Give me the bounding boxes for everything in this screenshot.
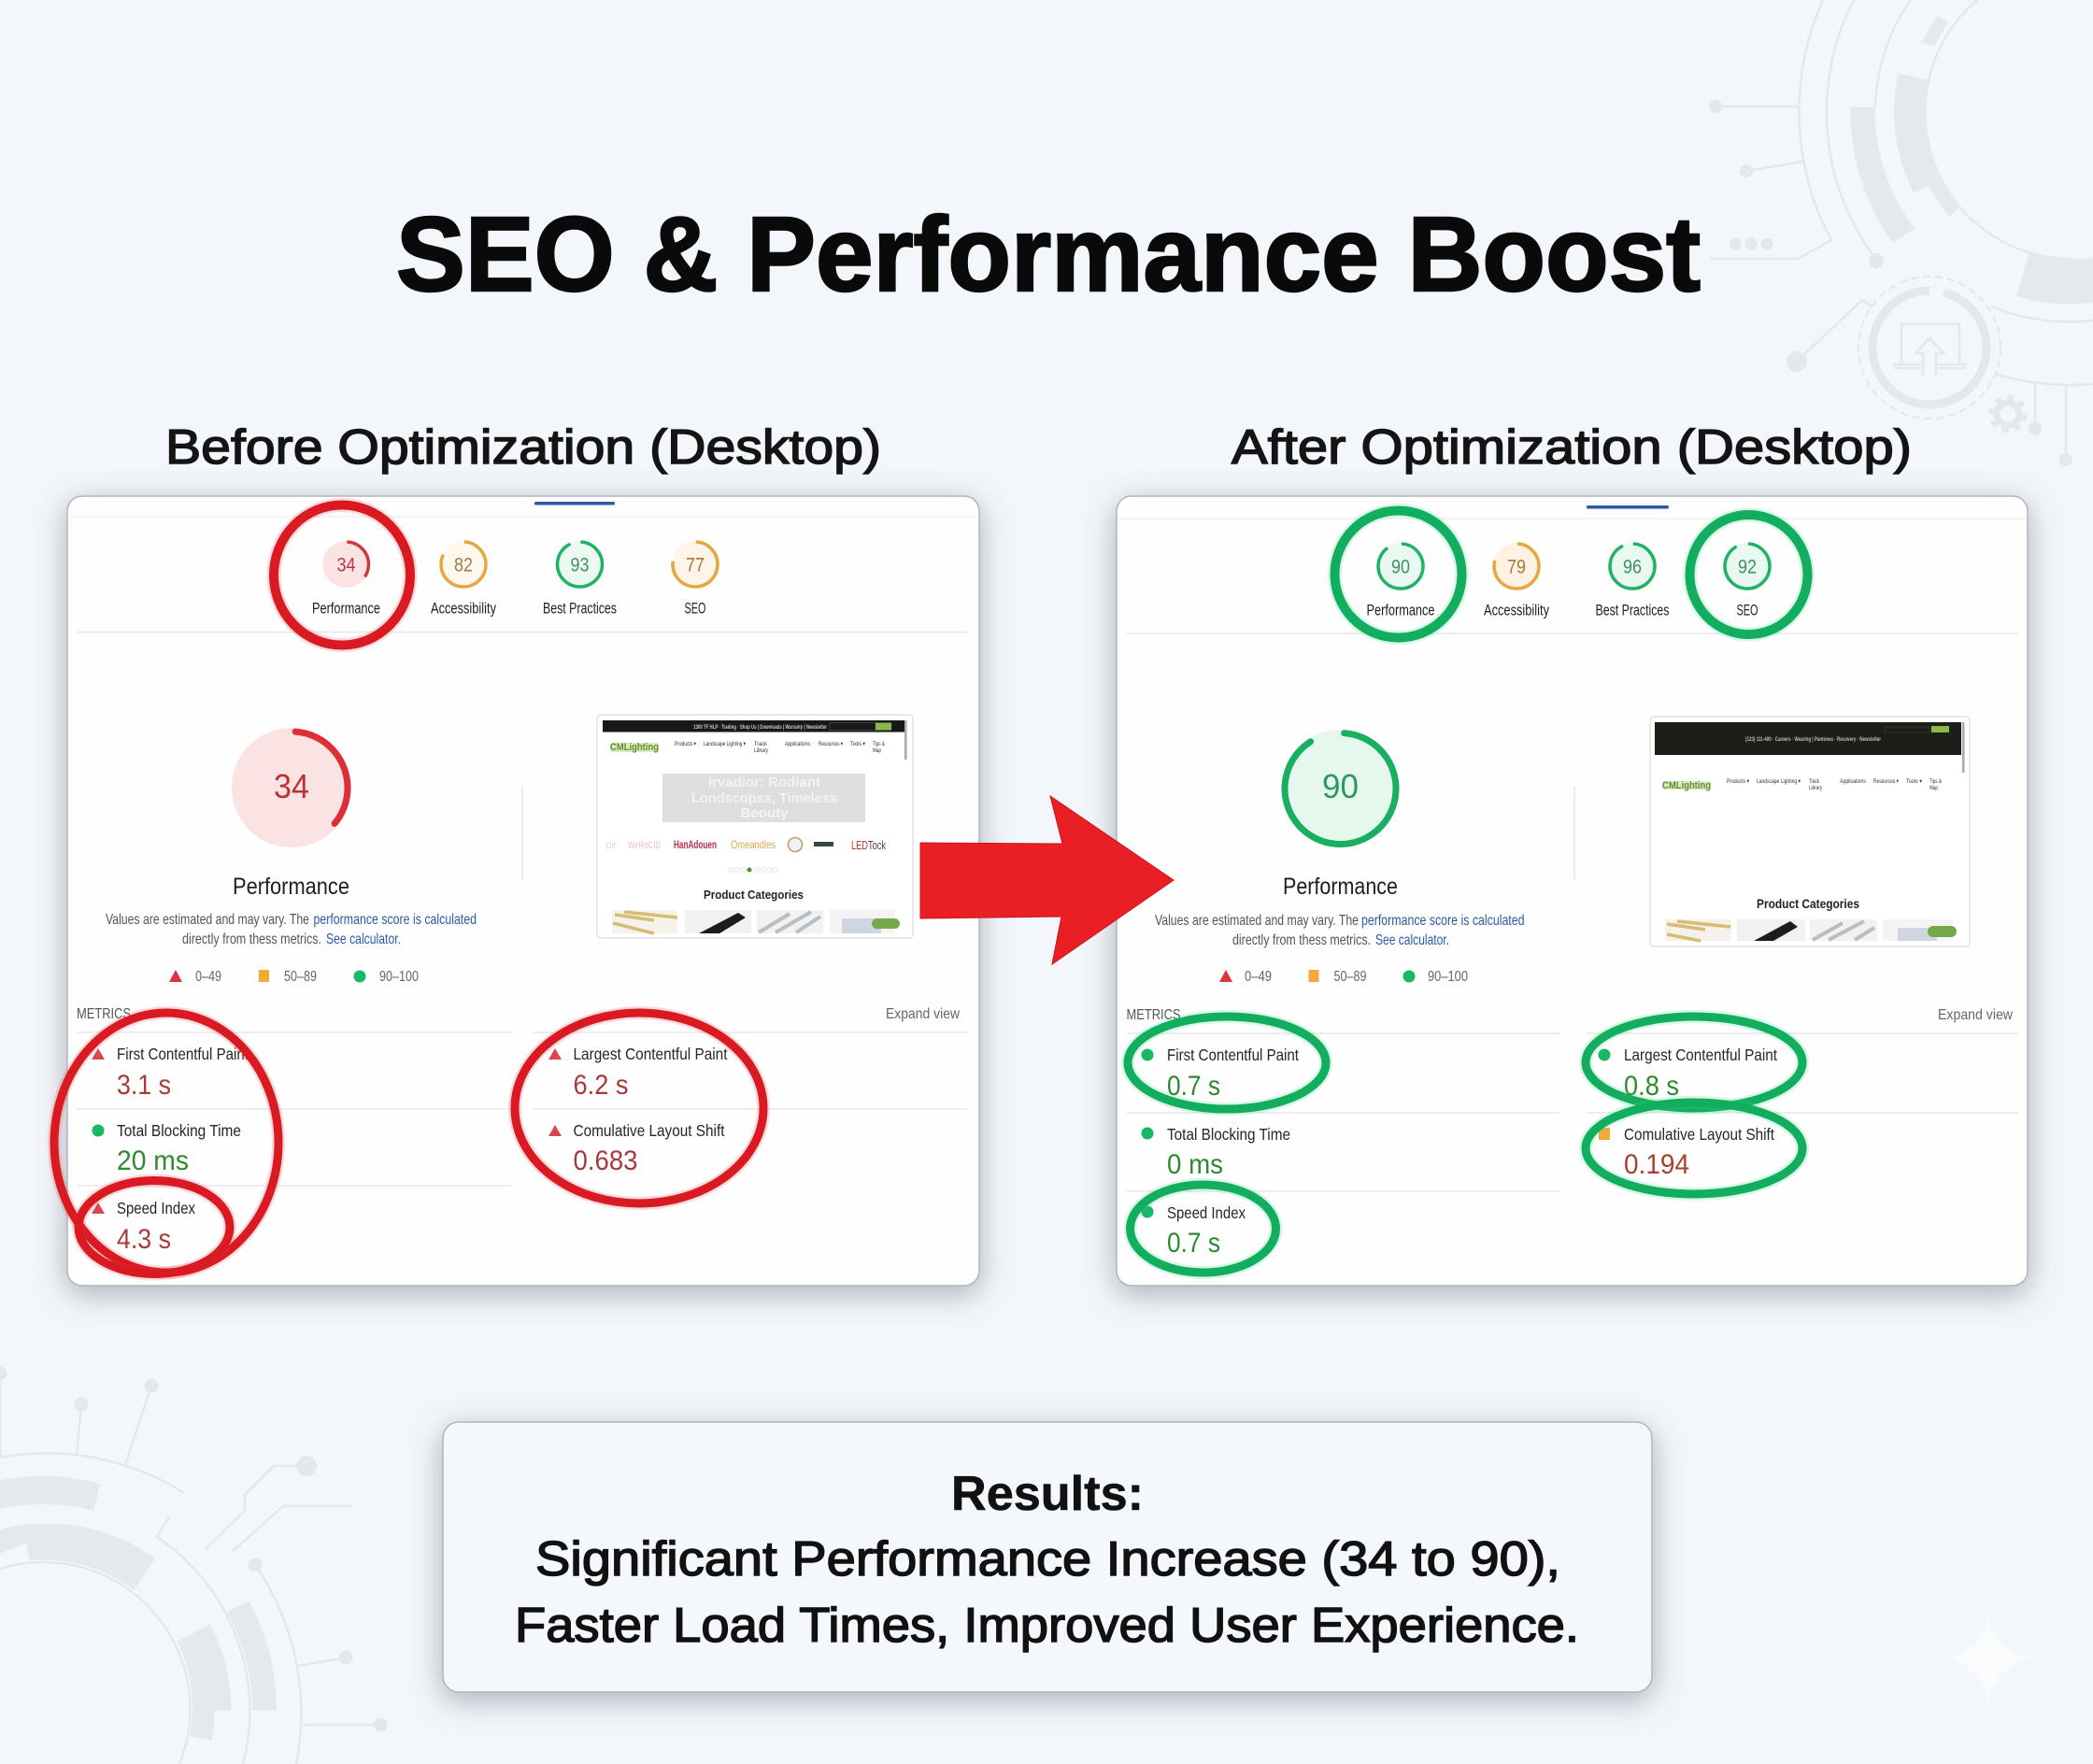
- screenshot: website before: Products ▾: [675, 741, 697, 747]
- metric: first contentful paint: 3.1 s: [117, 1070, 171, 1101]
- metric: cumulative layout shift: Comulative Layout Shift: [574, 1121, 725, 1140]
- screenshot: website before: Library: [754, 747, 769, 754]
- panel: results: [443, 1422, 1652, 1692]
- screenshot: website before: HanAdouen: [674, 838, 717, 851]
- gauge: accessibility 82: 82: [454, 555, 473, 576]
- big gauge: performance 34: 34: [274, 767, 309, 805]
- screenshot: website before: Landscape Lighting ▾: [704, 741, 747, 747]
- text: score explanation: performance score is calculated: [1361, 913, 1525, 929]
- metric: speed index: 4.3 s: [117, 1224, 171, 1255]
- metric: first contentful paint: [92, 1045, 249, 1101]
- metrics header: METRICS: [1127, 1007, 1181, 1023]
- metric: cumulative layout shift: [1599, 1125, 1774, 1180]
- heading: before optimization: Before Optimization (Desktop): [165, 420, 881, 475]
- text: score explanation: directly from thess metrics.: [182, 932, 321, 947]
- metric: speed index: Speed Index: [1167, 1203, 1246, 1222]
- arrow: before to after: [920, 796, 1174, 964]
- big gauge: performance 34: [232, 728, 351, 847]
- gauge: accessibility 79: 79: [1507, 557, 1526, 577]
- metrics header: [1127, 1007, 2018, 1191]
- gauge: seo 77: [672, 541, 719, 617]
- legend: 0–49: [195, 969, 221, 985]
- screenshot: website after: Resources ▾: [1873, 778, 1900, 785]
- gauge: best practices 93: [543, 541, 617, 617]
- text: score explanation: Values are estimated and may vary. The: [106, 912, 309, 928]
- decoration: bottom left circuit circle: [0, 1366, 387, 1764]
- legend: 90–100: [1428, 969, 1468, 985]
- text: score explanation: [106, 912, 477, 947]
- metric: first contentful paint: 0.7 s: [1167, 1071, 1220, 1102]
- decoration: top right circuit circle: [1709, 0, 2093, 466]
- metric: total blocking time: 20 ms: [117, 1145, 189, 1176]
- gauge: seo 92: SEO: [1736, 602, 1758, 619]
- gauge: performance 34: Performance: [312, 600, 380, 617]
- screenshot: website before: Applications: [785, 741, 811, 747]
- legend: 50–89: [284, 969, 317, 985]
- metrics header: Expand view: [886, 1006, 960, 1022]
- callout rings: before: [54, 505, 763, 1274]
- gauge: seo 77: 77: [686, 555, 705, 576]
- screenshot: website after: Products ▾: [1727, 778, 1750, 785]
- title: SEO & Performance Boost: [396, 195, 1701, 313]
- metric: largest contentful paint: 6.2 s: [574, 1070, 628, 1101]
- gauge: best practices 93: Best Practices: [543, 600, 617, 617]
- legend: 50–89: [1334, 969, 1366, 985]
- decoration: sparkle: [1944, 1615, 2032, 1703]
- metric: first contentful paint: First Contentful Paint: [117, 1045, 249, 1063]
- screenshot: website after: Map: [1929, 785, 1938, 791]
- screenshot: website before: [597, 715, 913, 938]
- metric: largest contentful paint: Largest Contentful Paint: [1624, 1046, 1777, 1064]
- screenshot: website after: CMLighting: [1662, 780, 1711, 791]
- legend: 90–100: [379, 969, 419, 985]
- legend: 0–49: [1245, 969, 1272, 985]
- metric: speed index: Speed Index: [117, 1199, 195, 1217]
- big gauge: performance 90: 90: [1322, 767, 1359, 805]
- heading: after optimization: After Optimization (Desktop): [1232, 420, 1912, 475]
- screenshot: website before: Product Categories: [704, 888, 804, 902]
- screenshot: website before: Tools ▾: [850, 741, 866, 747]
- screenshot: website before: Irvadior: Rodiant: [708, 775, 820, 790]
- screenshot: website before: Omeandles: [731, 838, 776, 851]
- gauge: best practices 96: 96: [1623, 557, 1642, 577]
- screenshot: website before: Tips &: [873, 741, 885, 747]
- gauge: performance 90: 90: [1391, 557, 1410, 577]
- panel: after optimization report: [1117, 496, 2028, 1286]
- text: score explanation: [1155, 913, 1525, 948]
- screenshot: website after: (123) 111-400 · Careers · Wearing | Pantones · Recovery · Newsletter: [1745, 736, 1881, 743]
- metric: cumulative layout shift: Comulative Layout Shift: [1624, 1125, 1774, 1144]
- metrics header: [77, 1006, 968, 1186]
- metric: cumulative layout shift: 0.683: [574, 1145, 637, 1176]
- legend: [1219, 969, 1468, 985]
- metric: cumulative layout shift: 0.194: [1624, 1149, 1689, 1180]
- text: score explanation: performance score is calculated: [314, 912, 477, 928]
- results text: [515, 1467, 1579, 1653]
- results text: Results:: [951, 1467, 1144, 1521]
- gauge: accessibility 82: Accessibility: [431, 600, 497, 617]
- gauge: seo 77: SEO: [684, 600, 706, 617]
- screenshot: website after: Landscape Lighting ▾: [1757, 778, 1801, 785]
- screenshot: website before: CMLighting: [610, 742, 659, 753]
- text: score explanation: Values are estimated and may vary. The: [1155, 913, 1359, 929]
- text: score explanation: directly from thess metrics.: [1232, 932, 1371, 948]
- screenshot: website after: Product Categories: [1757, 896, 1859, 911]
- metric: cumulative layout shift: [548, 1121, 725, 1176]
- metric: largest contentful paint: 0.8 s: [1624, 1071, 1679, 1102]
- big gauge: performance 90: [1281, 729, 1400, 848]
- screenshot: website after: Tools ▾: [1906, 778, 1923, 785]
- screenshot: website before: LEDTock: [851, 838, 886, 852]
- screenshot: website before: Dif: [605, 841, 616, 850]
- gauge: best practices 93: 93: [570, 555, 589, 576]
- gauge: performance 34: [312, 541, 380, 617]
- screenshot: website before: Londscopss, Timeless: [691, 790, 837, 806]
- metric: total blocking time: Total Blocking Time: [1167, 1125, 1290, 1144]
- metric: first contentful paint: First Contentful Paint: [1167, 1046, 1299, 1064]
- metric: total blocking time: [1142, 1125, 1290, 1180]
- screenshot: website after: Library: [1809, 785, 1823, 791]
- gauge: performance 90: Performance: [1366, 602, 1435, 619]
- legend: [169, 969, 419, 985]
- results text: Significant Performance Increase (34 to 90),: [535, 1532, 1560, 1586]
- metric: total blocking time: [92, 1121, 241, 1176]
- metric: total blocking time: Total Blocking Time: [117, 1121, 241, 1140]
- gauge: seo 92: 92: [1738, 557, 1757, 577]
- screenshot: website before: Resources ▾: [819, 741, 844, 747]
- results text: Faster Load Times, Improved User Experience.: [515, 1599, 1579, 1653]
- metric: largest contentful paint: [548, 1045, 728, 1101]
- screenshot: website before: 1300 TF HLP · Trading · Shop Us | Downloads | Warranty | Newsletter: [693, 724, 827, 731]
- metric: total blocking time: 0 ms: [1167, 1149, 1223, 1180]
- text: score explanation: See calculator.: [326, 932, 401, 947]
- metrics header: METRICS: [77, 1006, 131, 1022]
- text: score explanation: See calculator.: [1375, 932, 1449, 948]
- heading: performance: Performance: [1283, 874, 1398, 900]
- gauge: best practices 96: Best Practices: [1596, 602, 1669, 619]
- heading: performance: Performance: [233, 874, 349, 900]
- metric: first contentful paint: [1142, 1046, 1299, 1102]
- metrics header: Expand view: [1938, 1007, 2013, 1023]
- screenshot: website before: Beouty: [741, 805, 789, 821]
- screenshot: website before: Track: [754, 741, 768, 747]
- screenshot: website before: Map: [873, 747, 881, 754]
- gauge: accessibility 82: [431, 541, 497, 617]
- metric: speed index: [92, 1199, 195, 1255]
- screenshot: website after: Tips &: [1929, 778, 1942, 785]
- gauge: performance 90: [1366, 543, 1435, 619]
- panel: before optimization report: [54, 496, 979, 1286]
- metric: speed index: [1142, 1203, 1246, 1259]
- metric: speed index: 0.7 s: [1167, 1228, 1220, 1259]
- gauge: performance 34: 34: [336, 555, 356, 576]
- screenshot: website after: Applications: [1840, 778, 1867, 785]
- screenshot: website before: WeRoCID: [628, 840, 661, 851]
- screenshot: website after: Track: [1809, 778, 1820, 785]
- callout rings: after: [1128, 510, 1807, 1273]
- screenshot: website after: [1650, 717, 1970, 946]
- gauge: best practices 96: [1596, 543, 1669, 619]
- metric: largest contentful paint: Largest Contentful Paint: [574, 1045, 728, 1063]
- metric: largest contentful paint: [1598, 1046, 1777, 1102]
- gauge: accessibility 79: [1484, 543, 1550, 619]
- gauge: seo 92: [1724, 543, 1771, 619]
- gauge: accessibility 79: Accessibility: [1484, 602, 1550, 619]
